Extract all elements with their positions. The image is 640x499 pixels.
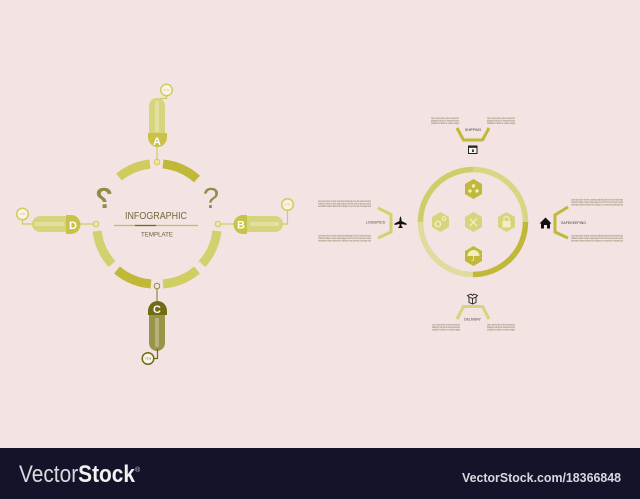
large ring [420, 170, 526, 274]
pill D: D [69, 220, 77, 232]
pill B: 67% [284, 202, 291, 206]
hexagon: radiation [465, 179, 482, 199]
delivery panel: incididunt ut labore et dolore magna [432, 328, 460, 332]
shipping panel: Lorem ipsum dolor sit amet consectetur [431, 117, 459, 120]
footer image id: VectorStock.com/18366848 [462, 470, 621, 485]
pill C: 71% [145, 356, 151, 360]
hexagon: gears [432, 212, 449, 232]
hexagon: padlock [498, 212, 515, 232]
icon: box [468, 294, 478, 304]
icon: calendar [468, 146, 477, 154]
icon: house [540, 218, 552, 228]
shipping panel: incididunt ut labore et dolore magna [487, 122, 515, 125]
logistics panel: exercitation ullamco laboris nisi ut aliquip ex ea commodo consequat duis [318, 205, 372, 208]
footer logo: VectorStock [19, 461, 136, 488]
pill A: A [153, 136, 161, 148]
subtitle: template: TEMPLATE [141, 232, 173, 238]
segmented ring [97, 164, 217, 284]
delivery panel: Lorem ipsum dolor sit amet consectetur [487, 324, 515, 326]
safekeeping panel [555, 198, 624, 242]
pill B [215, 199, 293, 234]
question mark right: ? [203, 183, 219, 215]
question mark left: ? [95, 183, 113, 215]
logistics panel: incididunt ut labore et dolore magna aliqua ut enim ad minim veniam quis nostrud [318, 237, 371, 240]
pill A: 57% [163, 88, 170, 92]
delivery panel: incididunt ut labore et dolore magna [487, 328, 515, 332]
pill D [17, 208, 99, 234]
pill D: 24% [19, 212, 26, 216]
logistics panel [318, 200, 391, 242]
shipping panel: incididunt ut labore et dolore magna [431, 122, 459, 125]
hexagon: tools [465, 212, 482, 232]
pill A [148, 84, 172, 165]
delivery panel: Lorem ipsum dolor sit amet consectetur [432, 324, 460, 326]
title divider [114, 224, 198, 226]
shipping panel [431, 117, 515, 140]
title: infographic: INFOGRAPHIC [125, 211, 187, 222]
shipping panel: SHIPPING [465, 128, 481, 132]
shipping panel: adipiscing elit sed do eiusmod tempor [487, 120, 515, 122]
pill C: C [153, 304, 161, 316]
logistics panel: LOGISTICS [366, 220, 386, 224]
logistics panel: Lorem ipsum dolor sit amet consectetur adipiscing elit sed do eiusmod tempor [318, 200, 371, 203]
icon: airplane [394, 216, 406, 228]
logistics panel: exercitation ullamco laboris nisi ut aliquip ex ea commodo consequat duis [318, 240, 372, 242]
footer bar [0, 448, 640, 499]
shipping panel: adipiscing elit sed do eiusmod tempor [431, 120, 459, 122]
pill C [142, 283, 167, 364]
logistics panel: Lorem ipsum dolor sit amet consectetur adipiscing elit sed do eiusmod tempor [318, 234, 371, 238]
delivery panel: DELIVERY [464, 318, 482, 322]
delivery panel: adipiscing elit sed do eiusmod tempor [432, 326, 460, 329]
logistics panel: incididunt ut labore et dolore magna aliqua ut enim ad minim veniam quis nostrud [318, 202, 371, 206]
safekeeping panel: SAFEKEEPING [561, 221, 586, 225]
pill B: B [237, 220, 245, 232]
shipping panel: Lorem ipsum dolor sit amet consectetur [487, 117, 515, 120]
hexagon: umbrella [465, 246, 482, 266]
delivery panel: adipiscing elit sed do eiusmod tempor [487, 326, 515, 329]
delivery panel [432, 306, 515, 332]
registered mark: ® [135, 466, 141, 474]
